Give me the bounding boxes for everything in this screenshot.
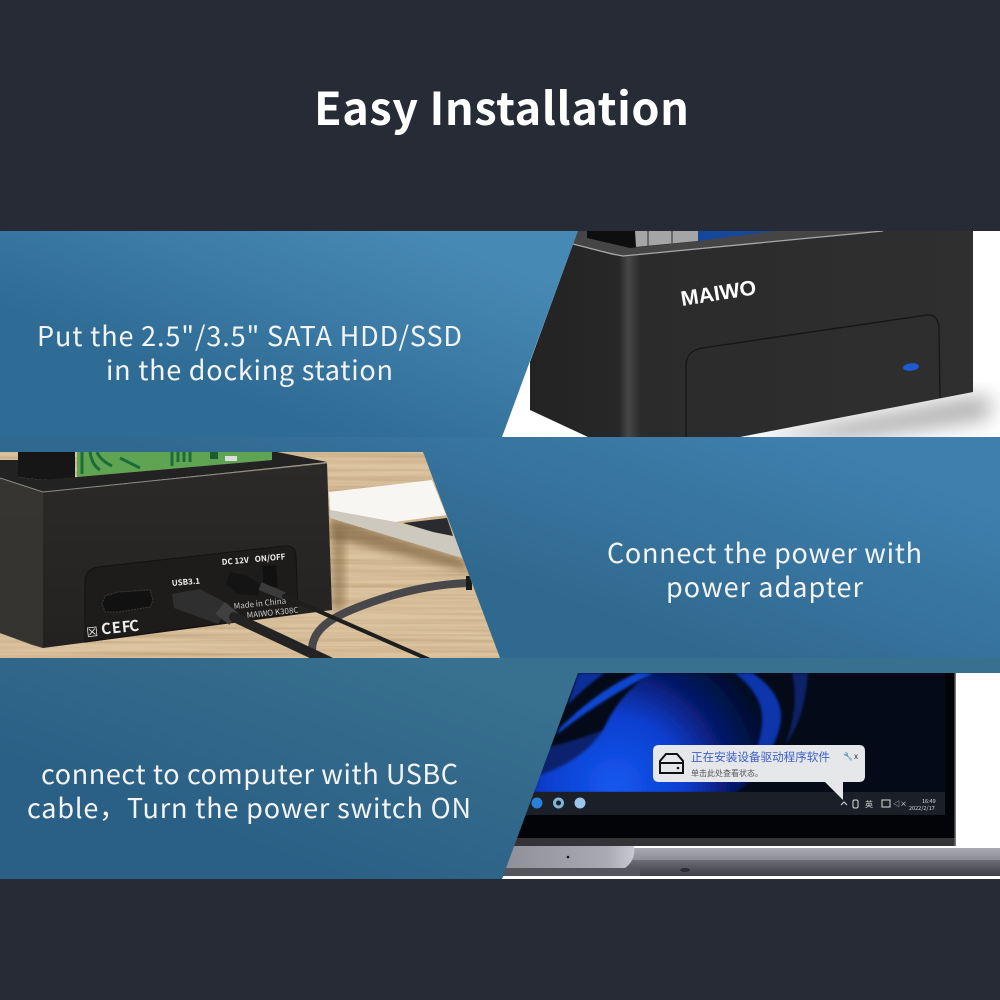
popup subtitle: 单击此处查看状态。 — [691, 768, 763, 779]
system tray: 2022/2/17 — [909, 804, 935, 812]
circuit board — [77, 452, 272, 477]
panel: step 2 caption band — [0, 437, 1000, 658]
taskbar — [500, 792, 945, 815]
LED indicator — [903, 363, 919, 371]
USB plug — [172, 589, 230, 624]
laptop on desk — [329, 480, 462, 558]
system tray: 英 — [865, 799, 873, 810]
certification marks: C E FC — [100, 615, 140, 640]
dock shadow on desk — [332, 530, 345, 612]
port labels: MAIWO K308C — [246, 605, 299, 621]
drive icon — [660, 754, 683, 773]
port labels — [171, 551, 299, 621]
cable end plug — [466, 576, 472, 590]
step 2 text: power adapter — [666, 566, 864, 605]
dock rim highlight — [573, 231, 883, 256]
step 3 text: connect to computer with USBC — [41, 753, 458, 792]
panel: step 1 photo — [500, 231, 1000, 440]
system tray: ◁× — [893, 799, 907, 809]
dock top surface — [0, 452, 327, 492]
dock rim highlight — [0, 463, 327, 492]
step 2 text: Connect the power with — [607, 532, 922, 571]
step 3 text: cable，Turn the power switch ON — [27, 787, 471, 826]
wrench and close: 🔧 — [843, 751, 853, 762]
connector panel — [85, 546, 298, 642]
port labels: DC 12V — [221, 555, 249, 568]
wallpaper swirl — [533, 673, 808, 793]
dock body — [530, 231, 973, 437]
dock body — [0, 463, 332, 648]
dock side face — [0, 478, 43, 648]
laptop base — [500, 846, 1000, 879]
panel: step 3 photo — [500, 673, 1000, 879]
port labels: Made in China — [233, 596, 287, 612]
notification popup: x — [854, 751, 858, 762]
SATA opening — [102, 590, 153, 612]
drive bracket — [18, 452, 75, 480]
panel: step 1 caption band — [0, 231, 578, 437]
power plug — [226, 572, 262, 596]
system tray: 16:49 — [922, 797, 936, 805]
step 1 text: Put the 2.5"/3.5" SATA HDD/SSD — [37, 315, 462, 354]
laptop screen — [500, 673, 956, 846]
certification marks — [87, 620, 139, 637]
cables — [234, 583, 467, 662]
brand logo: MAIWO — [679, 276, 758, 311]
system tray — [840, 799, 936, 811]
infographic canvas — [0, 88, 1000, 879]
power switch — [262, 565, 278, 588]
title: Easy Installation — [314, 73, 689, 138]
port labels: USB3.1 — [171, 576, 201, 589]
certification marks: ☒ — [85, 621, 99, 641]
wooden desk — [0, 452, 500, 658]
dock floor shadow — [762, 386, 1000, 437]
panel: step 3 caption band — [0, 658, 1000, 879]
laptop shadow on desk — [330, 516, 470, 572]
dock front door — [686, 315, 940, 437]
notification popup — [653, 745, 865, 800]
taskbar icons — [532, 798, 586, 808]
popup title: 正在安装设备驱动程序软件 — [691, 749, 830, 765]
step 1 text: in the docking station — [106, 349, 393, 388]
dock interior with drive — [560, 231, 883, 256]
panel: step 2 photo — [0, 452, 500, 662]
port labels: ON/OFF — [254, 551, 286, 565]
